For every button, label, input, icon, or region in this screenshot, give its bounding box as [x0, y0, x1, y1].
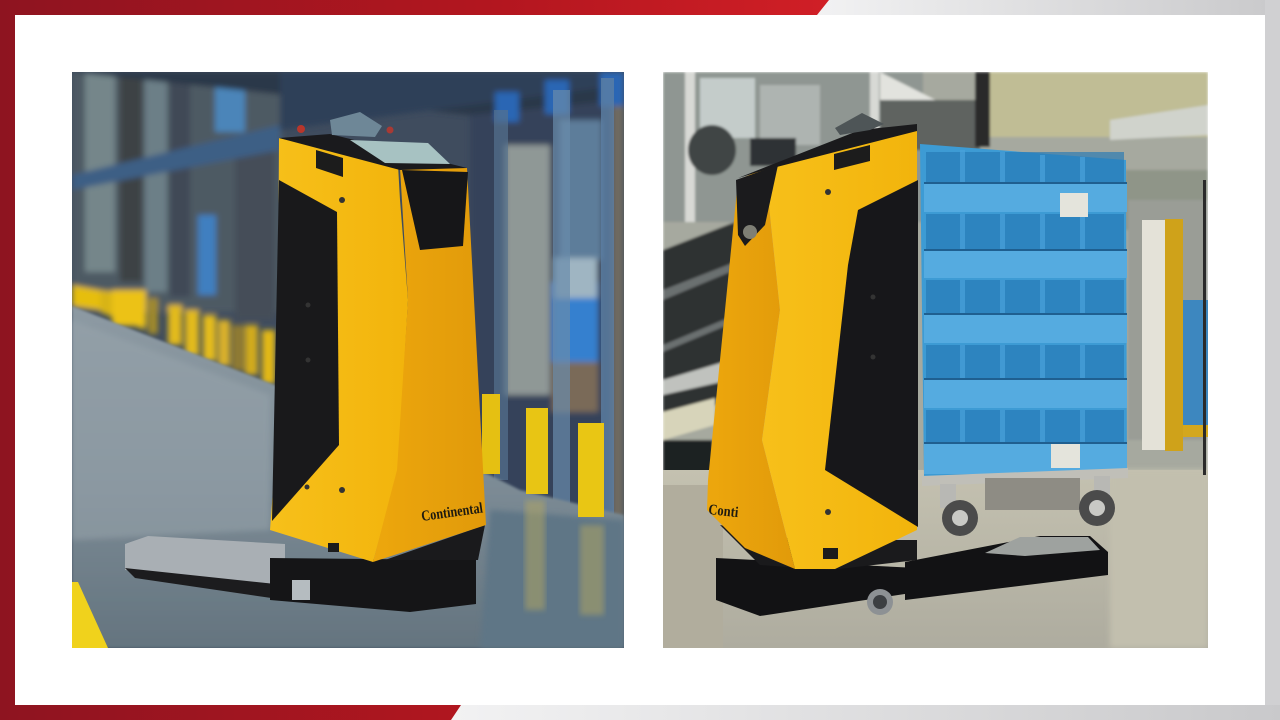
- photo: robot towing crates: [663, 72, 1208, 648]
- camera housing: [736, 165, 778, 246]
- robot top panel: [279, 134, 467, 170]
- crate ribs: [960, 150, 1085, 442]
- background yellow post: [1142, 180, 1208, 475]
- handle slot: [834, 145, 870, 170]
- robot body left: [707, 168, 795, 569]
- warehouse floor: [72, 306, 624, 648]
- robot base: [270, 558, 476, 612]
- robot body right: [762, 130, 917, 569]
- robot: side view: [707, 113, 1108, 616]
- factory floor: [663, 470, 1208, 648]
- screws: [339, 197, 345, 203]
- top edge: [738, 124, 917, 178]
- black side panel: [272, 180, 339, 521]
- robot fork: [125, 536, 285, 585]
- sensors on top: [835, 113, 884, 135]
- robot fork: [905, 536, 1108, 600]
- warehouse background: [72, 72, 624, 648]
- photo: robot in warehouse aisle: [72, 72, 624, 648]
- sensors on top: [330, 112, 382, 137]
- crate stack: [920, 144, 1127, 477]
- robot logo: Conti: [708, 502, 739, 521]
- factory background: [663, 72, 1208, 486]
- screws: [825, 189, 831, 195]
- robot body right: [373, 168, 486, 562]
- trolley: [922, 468, 1128, 536]
- robot: forward facing: [125, 112, 486, 612]
- yellow bollards: [482, 394, 604, 517]
- black side panel: [825, 180, 918, 527]
- robot logo: Continental: [420, 500, 484, 525]
- handle slot: [316, 150, 343, 177]
- robot body left: [270, 138, 408, 562]
- camera housing: [402, 170, 468, 250]
- robot base: [716, 558, 918, 616]
